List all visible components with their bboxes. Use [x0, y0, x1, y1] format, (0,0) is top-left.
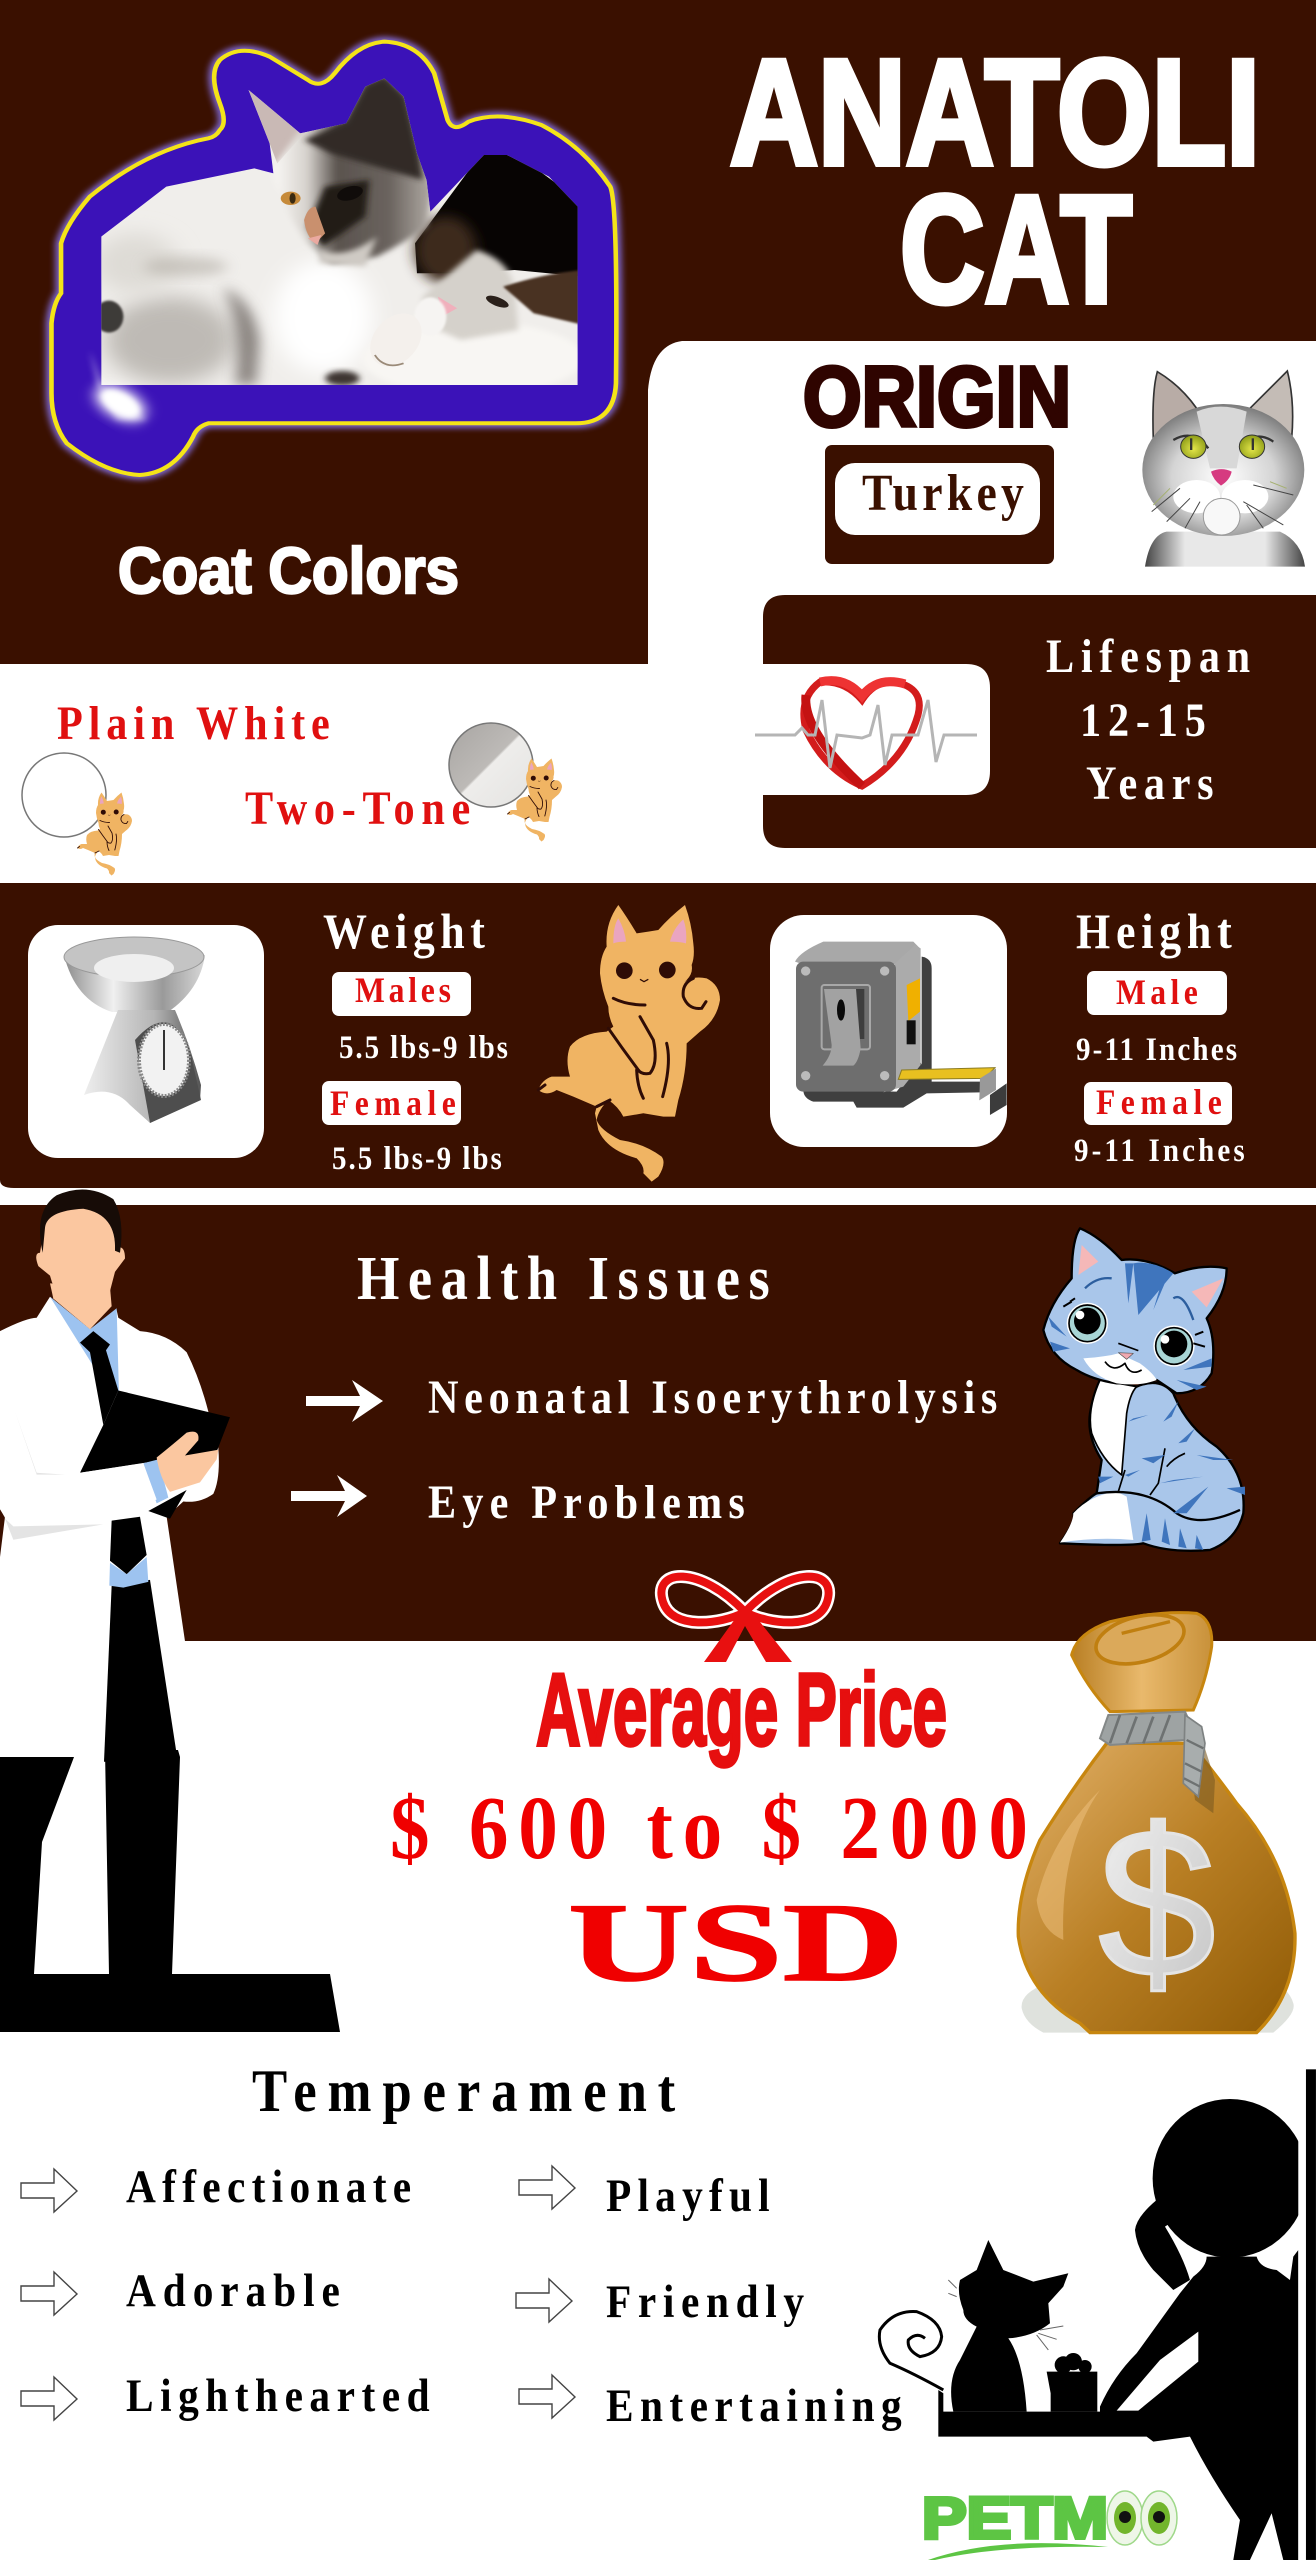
- icon: heart with pulse: [755, 681, 977, 786]
- weight text: 5.5 lbs-9 lbs: [332, 1139, 502, 1176]
- icon: kitchen scale: [28, 925, 264, 1158]
- icon: tape measure: [770, 915, 1007, 1147]
- lifespan text: [1046, 630, 1250, 810]
- weight text: Weight: [323, 904, 485, 960]
- height text: 9-11 Inches: [1074, 1131, 1245, 1168]
- icon: orange cat: [538, 905, 720, 1182]
- text: adorable: Adorable: [126, 2265, 340, 2317]
- icon: gray cat portrait: [1142, 371, 1305, 567]
- arrow: health 1: [306, 1380, 383, 1422]
- title: [730, 28, 1260, 335]
- height text: 9-11 Inches: [1076, 1030, 1237, 1067]
- panel: health issues: [0, 1205, 1316, 1641]
- arrow: entertaining: [519, 2375, 575, 2418]
- height text: Height: [1076, 904, 1232, 960]
- text: eye problems: Eye Problems: [428, 1476, 745, 1529]
- swatch: two-tone circle: [449, 723, 533, 807]
- arrow: health 2: [291, 1475, 367, 1517]
- origin value box: [825, 445, 1054, 564]
- weight text: Males: [355, 971, 451, 1010]
- text: neonatal isoerythrolysis: Neonatal Isoerythrolysis: [428, 1371, 997, 1424]
- heading: coat colors: Coat Colors: [118, 534, 459, 607]
- lifespan text: Years: [1086, 757, 1214, 810]
- heading: health issues: Health Issues: [357, 1244, 770, 1313]
- panel: lifespan: [755, 595, 1316, 848]
- panel: weight and height strip: [0, 883, 1316, 1188]
- swatch: white circle: [22, 753, 106, 837]
- logo: petmoo: PETM: [922, 2486, 1108, 2551]
- text: playful: Playful: [606, 2170, 770, 2222]
- heading: temperament: Temperament: [252, 2059, 675, 2125]
- arrow: affectionate: [21, 2169, 77, 2212]
- arrow: adorable: [21, 2272, 77, 2315]
- lifespan text: Lifespan: [1046, 630, 1250, 683]
- cat photo: [94, 75, 583, 395]
- icon: money bag: $: [1098, 1784, 1216, 2021]
- origin value box: Turkey: [862, 463, 1024, 522]
- arrow: friendly: [516, 2279, 572, 2322]
- top brown panel: [0, 0, 1316, 664]
- logo: petmoo: [922, 2486, 1177, 2560]
- arrow: playful: [519, 2166, 575, 2209]
- text: entertaining: Entertaining: [606, 2380, 902, 2432]
- icon: doctor: [0, 1189, 340, 2032]
- label: two-tone: Two-Tone: [245, 782, 470, 835]
- weight text: [322, 904, 508, 1176]
- icon: small cat left: [78, 792, 132, 876]
- heading: origin: ORIGIN: [803, 350, 1071, 445]
- icon: red bow: [661, 1577, 829, 1662]
- height text: Female: [1096, 1083, 1222, 1122]
- panel: coat colors: [22, 697, 562, 876]
- title: CAT: [900, 164, 1132, 335]
- weight text: 5.5 lbs-9 lbs: [339, 1028, 508, 1065]
- text: affectionate: Affectionate: [126, 2161, 411, 2213]
- heading: average price: Average Price: [536, 1652, 947, 1767]
- text: friendly: Friendly: [606, 2276, 804, 2328]
- icon: small cat right: [508, 758, 562, 842]
- height text: Male: [1116, 973, 1198, 1012]
- photo frame with cats: [51, 42, 616, 475]
- icon: money bag: [1018, 1606, 1295, 2033]
- lifespan text: 12-15: [1080, 694, 1206, 747]
- doctor legs: [0, 1750, 340, 2032]
- label: plain white: Plain White: [57, 697, 330, 750]
- currency: USD: USD: [568, 1881, 904, 2005]
- icon: blue cat: [1043, 1228, 1245, 1551]
- arrow: lighthearted: [21, 2377, 77, 2420]
- panel: temperament list: [21, 2161, 902, 2432]
- illustration: girl and cat silhouette: [879, 2069, 1316, 2560]
- price range: $ 600 to $ 2000: [390, 1778, 1028, 1878]
- text: lighthearted: Lighthearted: [126, 2370, 430, 2422]
- weight text: Female: [330, 1084, 456, 1123]
- height text: [1074, 904, 1245, 1168]
